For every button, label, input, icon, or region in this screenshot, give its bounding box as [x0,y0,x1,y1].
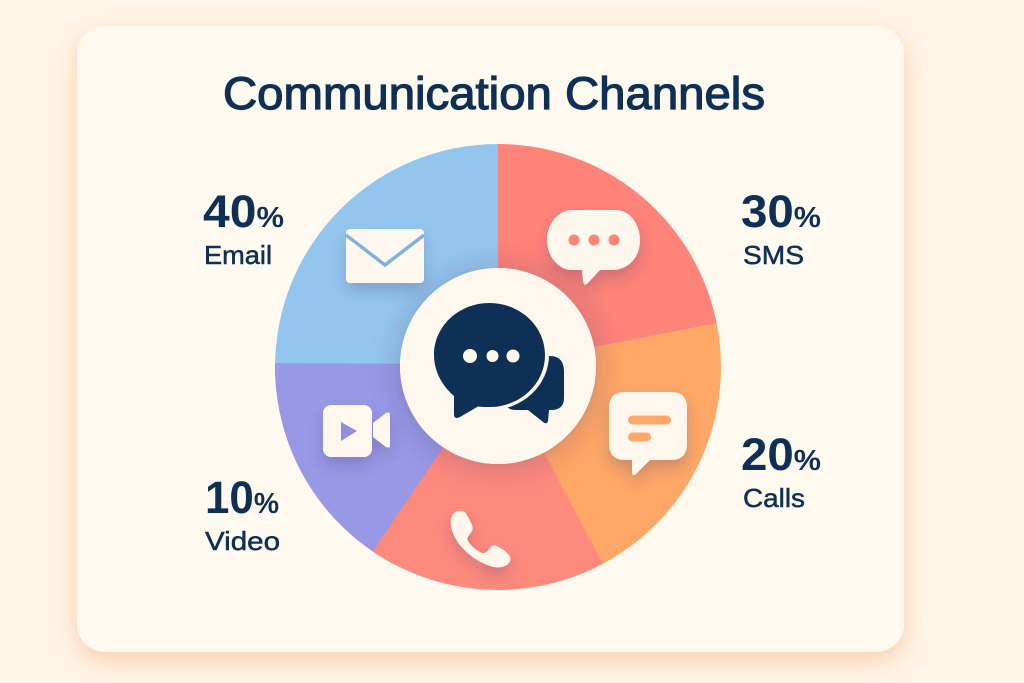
center hub [400,268,596,464]
icon: mail [346,229,424,283]
hub shadow [400,268,596,464]
front bubble [434,303,545,418]
label: Email: Email [204,240,272,270]
segment: SMS [498,144,717,348]
segment: Video [275,363,443,560]
title: Communication Channels [223,68,765,119]
label: Calls: Calls [743,483,805,513]
label: SMS [741,186,821,270]
label: SMS: SMS [743,240,804,270]
dots [463,349,520,363]
bubble separator [431,300,549,410]
icon: central chat bubbles [431,300,564,423]
back bubble [505,356,564,423]
label: SMS: 30% [741,186,821,237]
icon: phone [451,511,510,568]
label: Calls [741,429,821,513]
label: Calls: 20% [741,429,821,480]
segment: Calls [544,323,721,564]
label: Video: Video [205,526,280,556]
label: Video: 10% [205,472,279,523]
label: Email: 40% [203,186,284,237]
icon: message bubble [609,392,687,475]
icon: video camera [323,405,390,457]
label: Video [205,472,280,556]
segment: Phone [372,447,603,590]
panel: card [77,26,904,652]
segment: Email [275,144,498,364]
pie chart [275,144,721,590]
label: Email [203,186,284,270]
icon: SMS bubble [547,210,640,285]
